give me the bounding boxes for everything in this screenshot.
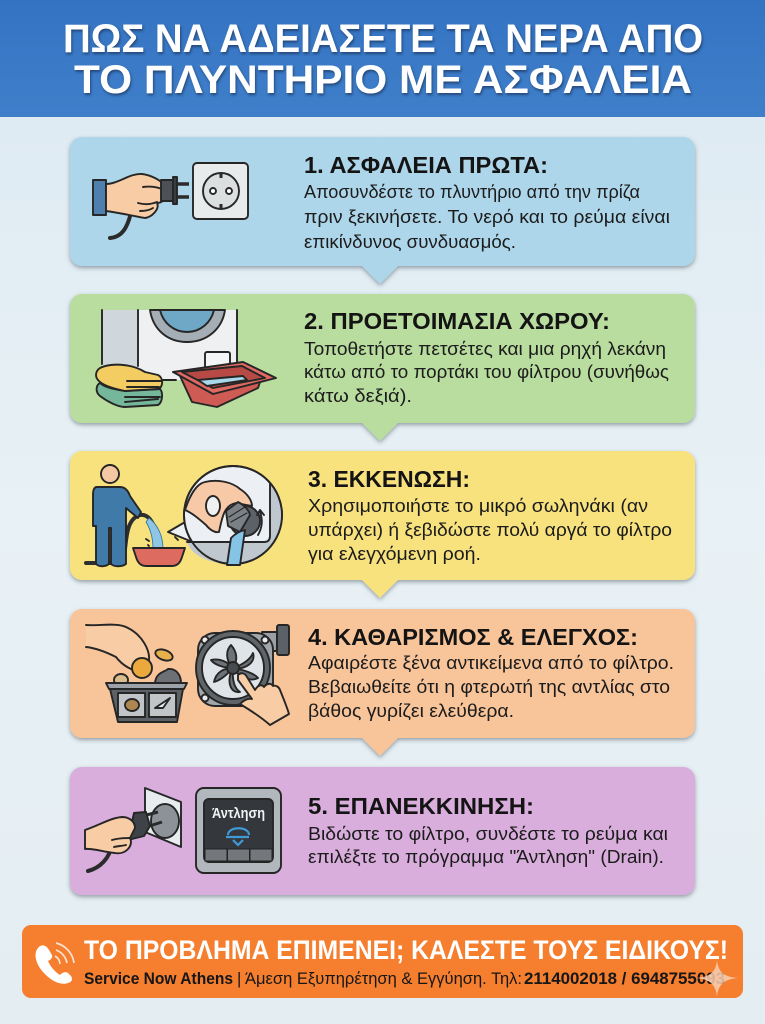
icon: hand unscrewing filter close-up (168, 466, 282, 565)
step 2 text: Τοποθετήστε πετσέτες και μια ρηχή λεκάνη (304, 338, 666, 359)
step 4 text: βάθος γυρίζει ελεύθερα. (308, 700, 514, 721)
panel: step 3 draining (70, 451, 695, 598)
step 4 text: Αφαιρέστε ξένα αντικείμενα από το φίλτρο. (308, 652, 674, 673)
step 5 text: Βιδώστε το φίλτρο, συνδέστε το ρεύμα και (308, 823, 668, 844)
icon: control panel with Άντληση program: Άντληση (212, 805, 265, 822)
step 3 heading: 3. ΕΚΚΕΝΩΣΗ: (308, 466, 470, 492)
step 1 heading: 1. ΑΣΦΑΛΕΙΑ ΠΡΩΤΑ: (304, 152, 548, 178)
panel: step 2 preparation (70, 294, 695, 441)
step 2 text: κάτω από το πορτάκι του φίλτρου (συνήθως (304, 361, 669, 382)
step 4 text (308, 652, 674, 721)
step 2 text (304, 338, 669, 406)
icon: hand removing coins into filter basket (86, 625, 187, 722)
step 4 text: Βεβαιωθείτε ότι η φτερωτή της αντλίας στο (308, 676, 670, 697)
step 3 text (308, 495, 672, 564)
panel: step 4 cleaning and check (70, 609, 695, 756)
step 5 text: επιλέξτε το πρόγραμμα "Άντληση" (Drain). (308, 846, 664, 867)
contact details: | Άμεση Εξυπηρέτηση & Εγγύηση. Τηλ: (237, 969, 522, 988)
step 3 text: υπάρχει) ή ξεβιδώστε πολύ αργά το φίλτρο (308, 519, 672, 540)
step 4 heading: 4. ΚΑΘΑΡΙΣΜΟΣ & ΕΛΕΓΧΟΣ: (308, 624, 638, 650)
step 3 text: για ελεγχόμενη ροή. (308, 543, 481, 564)
title banner (0, 0, 765, 117)
step 1 text: Αποσυνδέστε το πλυντήριο από την πρίζα (304, 181, 640, 202)
icon: phone with signal waves (36, 943, 74, 984)
step 3 text: Χρησιμοποιήστε το μικρό σωληνάκι (αν (308, 495, 648, 516)
call-to-action heading: ΤΟ ΠΡΟΒΛΗΜΑ ΕΠΙΜΕΝΕΙ; ΚΑΛΕΣΤΕ ΤΟΥΣ ΕΙΔΙΚΟΥΣ! (84, 935, 728, 965)
step 2 heading: 2. ΠΡΟΕΤΟΙΜΑΣΙΑ ΧΩΡΟΥ: (304, 308, 610, 334)
contact details: 2114002018 / 6948755093 (524, 969, 725, 988)
icon: hand unplugging from socket (93, 163, 248, 238)
icon: washing machine, towels and basin (96, 310, 276, 407)
title banner: ΤΟ ΠΛΥΝΤΗΡΙΟ ΜΕ ΑΣΦΑΛΕΙΑ (74, 58, 692, 102)
icon: control panel with Άντληση program (196, 788, 281, 873)
step 1 text (304, 181, 670, 252)
step 5 text (308, 823, 668, 867)
icon: person draining water into basin (86, 465, 185, 566)
call-to-action banner (22, 925, 743, 998)
step 1 text: πριν ξεκινήσετε. Το νερό και το ρεύμα είναι (304, 206, 670, 227)
contact details: Service Now Athens (84, 969, 233, 988)
panel: step 1 safety (70, 137, 695, 284)
contact details (84, 969, 725, 988)
step 5 heading: 5. ΕΠΑΝΕΚΚΙΝΗΣΗ: (308, 793, 534, 819)
title banner: ΠΩΣ ΝΑ ΑΔΕΙΑΣΕΤΕ ΤΑ ΝΕΡΑ ΑΠΟ (63, 17, 703, 61)
panel: step 5 restart (70, 767, 695, 895)
icon: pump impeller checked by finger (196, 625, 289, 725)
icon: hand plugging into wall socket (85, 788, 181, 871)
step 1 text: επικίνδυνος συνδυασμός. (304, 231, 516, 252)
step 2 text: κάτω δεξιά). (304, 385, 412, 406)
